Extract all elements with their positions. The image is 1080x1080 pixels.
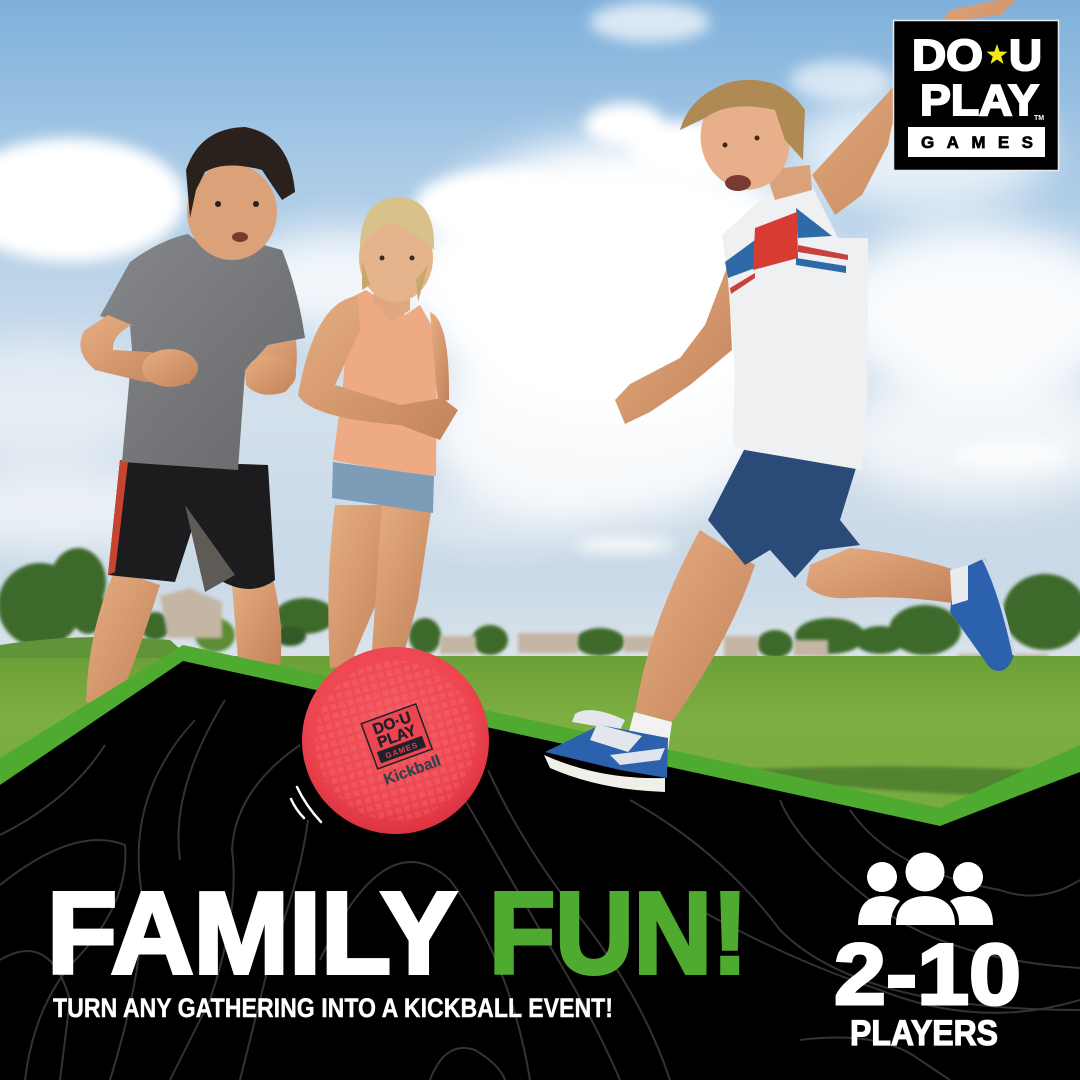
kickball	[302, 647, 489, 834]
punching arm	[615, 265, 732, 424]
motion lines by ball	[291, 787, 321, 822]
logo badge: TM	[1034, 115, 1044, 122]
right shoe	[950, 558, 1014, 671]
neck and head	[765, 165, 812, 200]
left shoe	[572, 710, 625, 730]
raised arm	[812, 0, 1022, 215]
ball logo: Kickball	[382, 752, 443, 789]
ball logo: DO·U	[371, 709, 414, 738]
photo background: distant trees and houses	[0, 548, 1080, 664]
ball logo	[361, 703, 443, 790]
logo badge: U	[1009, 31, 1042, 80]
black topographic band with green edge	[0, 645, 1080, 1080]
headline: FUN!	[489, 868, 748, 998]
logo star	[986, 44, 1008, 64]
logo badge	[894, 20, 1058, 170]
rear leg	[806, 548, 955, 603]
subheading: TURN ANY GATHERING INTO A KICKBALL EVENT!	[53, 993, 613, 1023]
sock	[628, 712, 672, 750]
kid in white tank kicking	[544, 0, 1022, 792]
photo background: sky and clouds	[0, 0, 1080, 680]
icon: group of people	[858, 852, 993, 925]
kid in peach tank top	[298, 197, 458, 668]
kid in grey t-shirt	[80, 127, 305, 708]
photo background: grass field	[0, 637, 1080, 830]
ball logo: GAMES	[384, 740, 420, 761]
logo badge: PLAY	[920, 76, 1039, 125]
headline: FAMILY	[47, 868, 457, 998]
players label: PLAYERS	[850, 1014, 998, 1053]
ball logo: PLAY	[375, 722, 419, 752]
front kicking leg	[635, 530, 755, 722]
contour lines	[0, 700, 1080, 1080]
tank top	[722, 178, 868, 470]
logo wordmark: DO	[912, 31, 983, 80]
logo badge: GAMES	[921, 133, 1033, 152]
player count: 2-10	[834, 927, 1021, 1023]
shorts	[708, 448, 860, 578]
headline	[47, 868, 748, 998]
